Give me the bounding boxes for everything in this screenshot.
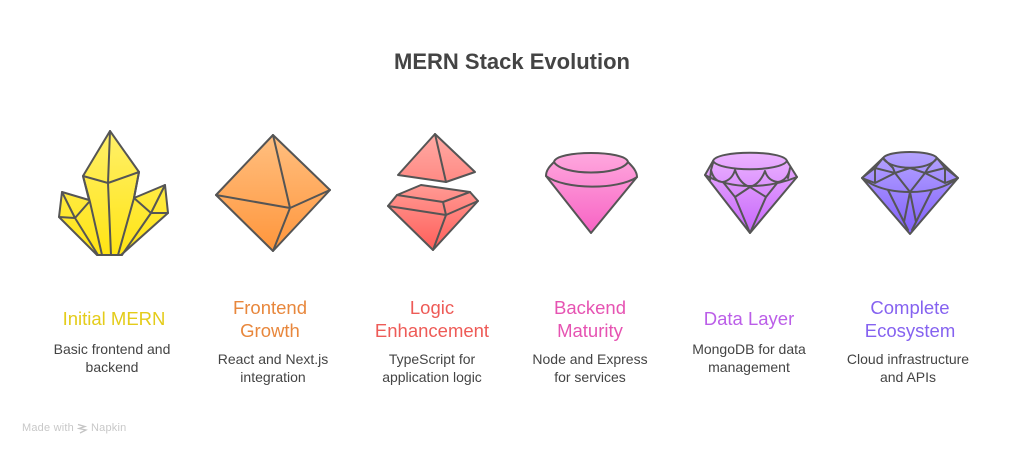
step 5 heading: Data Layer bbox=[704, 308, 794, 329]
icon: purple diamond bbox=[705, 153, 797, 233]
step 6 description: Cloud infrastructure bbox=[847, 351, 969, 367]
step 2 heading bbox=[233, 297, 307, 341]
step 5 description: management bbox=[708, 359, 790, 375]
step 2 description: integration bbox=[240, 369, 306, 385]
step 2 heading: Growth bbox=[240, 320, 300, 341]
watermark bbox=[22, 422, 126, 434]
step 2 description: React and Next.js bbox=[218, 351, 328, 367]
step 3 description: TypeScript for bbox=[389, 351, 475, 367]
step 3 description: application logic bbox=[382, 369, 482, 385]
step 2 heading: Frontend bbox=[233, 297, 307, 318]
step 4 description: Node and Express bbox=[532, 351, 648, 367]
step 6 heading bbox=[865, 297, 955, 341]
icon: violet diamond bbox=[862, 152, 958, 234]
step 3 heading: Enhancement bbox=[375, 320, 489, 341]
step 4 description: for services bbox=[554, 369, 626, 385]
icon: orange octahedron bbox=[216, 135, 330, 251]
step 4 heading bbox=[554, 297, 626, 341]
icon: pink diamond bbox=[546, 153, 637, 233]
step 5 description: MongoDB for data bbox=[692, 341, 806, 357]
step 1 heading: Initial MERN bbox=[63, 308, 165, 329]
step 5 description bbox=[692, 341, 806, 375]
step 3 heading: Logic bbox=[410, 297, 454, 318]
watermark: Made with bbox=[22, 422, 74, 434]
step 6 heading: Complete bbox=[870, 297, 950, 318]
step 6 description: and APIs bbox=[880, 369, 936, 385]
step 4 heading: Backend bbox=[554, 297, 626, 318]
step 3 description bbox=[382, 351, 482, 385]
step 4 heading: Maturity bbox=[557, 320, 623, 341]
watermark: Napkin bbox=[91, 422, 126, 434]
step 3 heading bbox=[375, 297, 489, 341]
step 1 description: Basic frontend and bbox=[54, 341, 170, 357]
step 4 description bbox=[532, 351, 648, 385]
icon: coral split gem bbox=[388, 134, 478, 250]
step 1 description: backend bbox=[86, 359, 138, 375]
title: MERN Stack Evolution bbox=[394, 49, 630, 74]
step 6 heading: Ecosystem bbox=[865, 320, 955, 341]
step 6 description bbox=[847, 351, 969, 385]
step 2 description bbox=[218, 351, 328, 385]
icon: yellow crystal bbox=[59, 131, 168, 255]
step 1 description bbox=[54, 341, 170, 375]
